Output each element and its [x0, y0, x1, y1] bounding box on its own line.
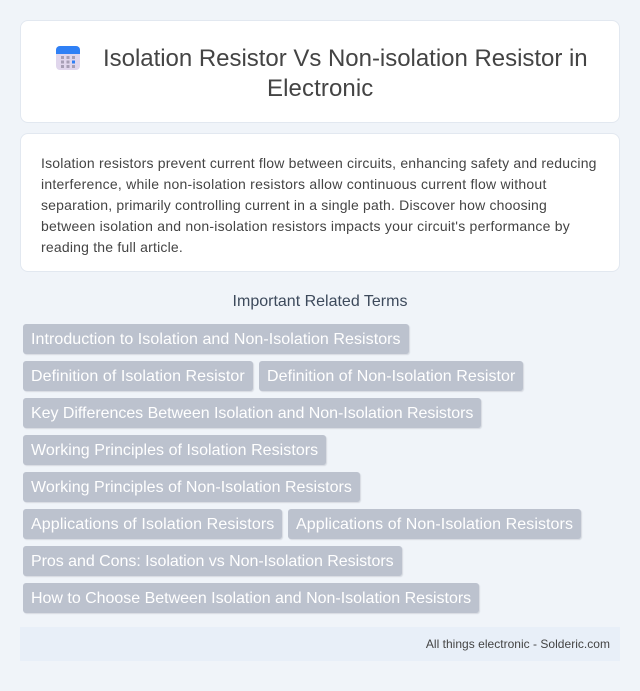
icon: calendar: [56, 46, 80, 70]
tag: [288, 509, 581, 539]
intro paragraph: [41, 155, 597, 255]
tag: Pros and Cons: Isolation vs Non-Isolation Resistors: [31, 553, 394, 570]
title: Electronic: [267, 75, 373, 102]
tag: [23, 324, 409, 354]
tag: [23, 435, 326, 465]
tag: [23, 546, 402, 576]
tag: How to Choose Between Isolation and Non-Isolation Resistors: [31, 590, 471, 607]
tag: Key Differences Between Isolation and Non-Isolation Resistors: [31, 405, 473, 422]
intro card: [20, 133, 620, 272]
tag: Working Principles of Non-Isolation Resistors: [31, 479, 352, 496]
tag: Applications of Isolation Resistors: [31, 516, 274, 533]
tag: [23, 472, 360, 502]
tag: Working Principles of Isolation Resistors: [31, 442, 318, 459]
intro paragraph: Isolation resistors prevent current flow between circuits, enhancing safety and reducing: [41, 155, 597, 171]
intro paragraph: between isolation and non-isolation resistors impacts your circuit's performance by: [41, 218, 570, 234]
tag: [23, 398, 481, 428]
header card: [20, 20, 620, 123]
tag: [23, 509, 282, 539]
intro paragraph: separation, primarily controlling current in a single path. Discover how choosing: [41, 197, 547, 213]
intro paragraph: reading the full article.: [41, 239, 183, 255]
intro paragraph: interference, while non-isolation resistors allow continuous current flow without: [41, 176, 547, 192]
tag: Definition of Non-Isolation Resistor: [267, 368, 515, 385]
tag: Introduction to Isolation and Non-Isolation Resistors: [31, 331, 401, 348]
tag: [23, 583, 479, 613]
tag: Definition of Isolation Resistor: [31, 368, 245, 385]
tag: [23, 361, 253, 391]
title: [103, 45, 588, 102]
related terms tags: [23, 324, 582, 614]
related terms heading: Important Related Terms: [233, 293, 407, 310]
tag: [259, 361, 523, 391]
footer text: All things electronic - Solderic.com: [426, 637, 610, 651]
tag: Applications of Non-Isolation Resistors: [296, 516, 573, 533]
footer bar: [20, 627, 620, 661]
title: Isolation Resistor Vs Non-isolation Resistor in: [103, 45, 588, 72]
